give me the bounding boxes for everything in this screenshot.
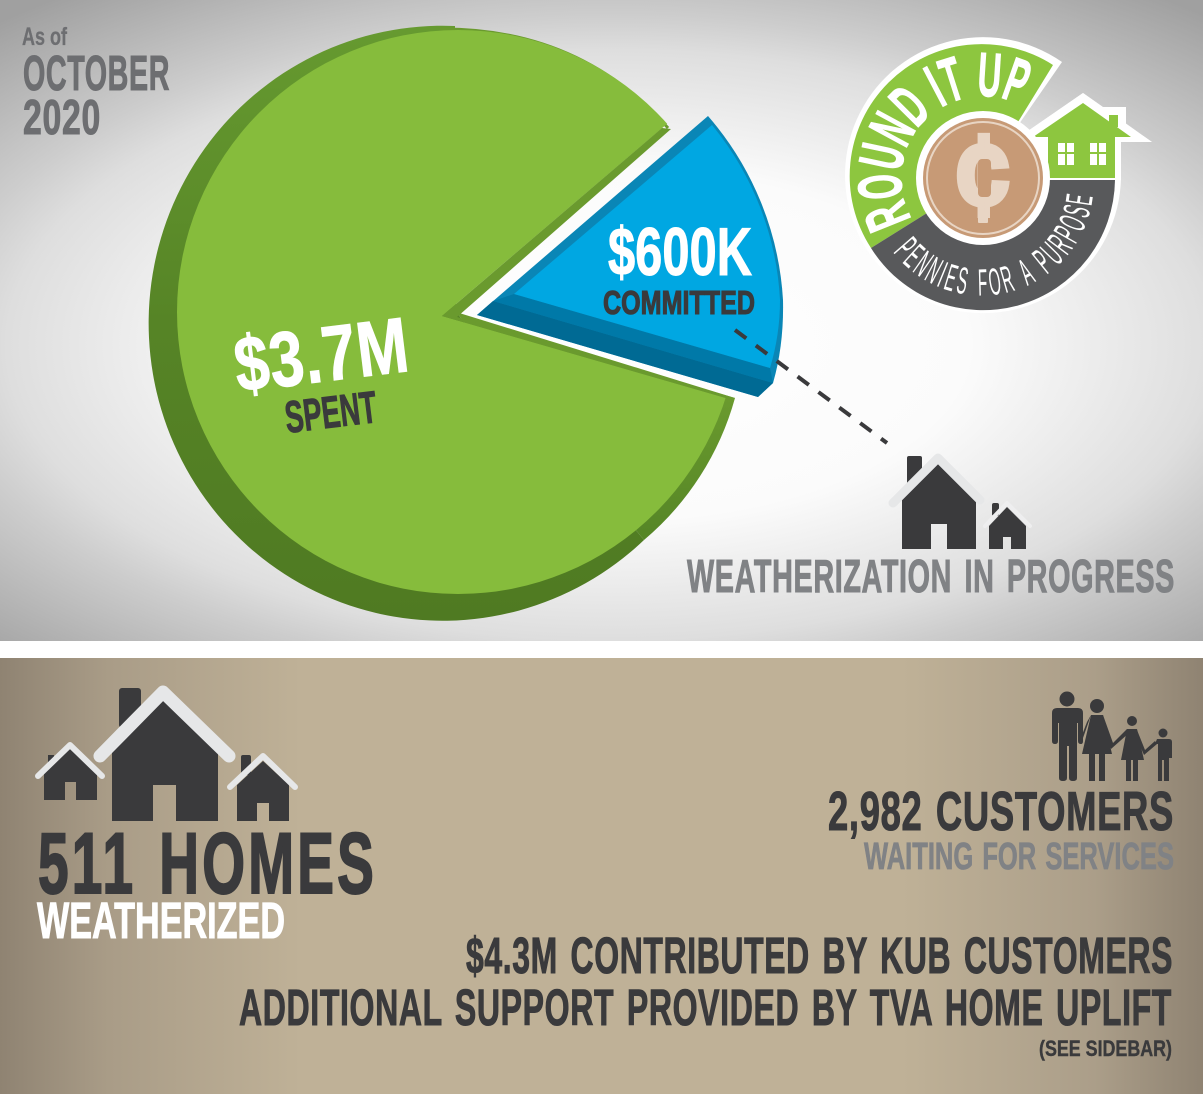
panel: bottom background <box>0 658 1203 1094</box>
icon: three homes <box>38 688 295 821</box>
text block: contributions <box>239 927 1173 1061</box>
girl <box>1121 716 1157 781</box>
text block: contributions: (SEE SIDEBAR) <box>1039 1036 1172 1061</box>
stat: homes weatherized: 511 HOMES <box>38 816 377 912</box>
blue slice: committed <box>477 116 783 397</box>
dashed leader line <box>735 330 887 443</box>
logo curved text: pennies for a purpose: PENNIES FOR A PURPOSE <box>894 194 1093 296</box>
green slice: spent <box>177 30 739 594</box>
boy <box>1155 728 1172 781</box>
date label: OCTOBER <box>23 47 170 101</box>
logo coin: ¢ <box>957 112 1009 237</box>
logo grey ring <box>871 178 1115 310</box>
label: spent: SPENT <box>282 381 380 443</box>
logo house <box>1025 93 1152 180</box>
stat: customers waiting <box>828 780 1174 878</box>
date label: 2020 <box>23 91 101 145</box>
logo green ring <box>850 44 1053 248</box>
man <box>1052 692 1083 781</box>
logo white backing <box>845 37 1152 313</box>
label: committed: $600K <box>608 214 752 290</box>
pie chart <box>149 26 783 621</box>
logo coin <box>916 111 1050 245</box>
label: committed: COMMITTED <box>603 284 755 321</box>
label: spent <box>229 300 414 443</box>
green slice edge bands <box>442 128 735 399</box>
logo curved text: round it up: ROUND IT UP <box>858 52 1031 234</box>
label: spent: $3.7M <box>229 300 414 409</box>
woman <box>1079 699 1129 781</box>
stat: homes weatherized: WEATHERIZED <box>37 892 285 949</box>
icon: weatherization houses <box>893 456 1030 549</box>
pie depth shadow <box>149 26 644 621</box>
label: committed <box>603 214 755 321</box>
green slice top rim <box>440 29 668 128</box>
stat: homes weatherized <box>37 816 377 949</box>
panel: top background <box>0 0 1203 641</box>
green slice rim right side <box>456 312 735 540</box>
logo: round it up <box>845 37 1152 312</box>
date label <box>22 23 170 145</box>
date label: As of <box>22 23 67 51</box>
icon: family <box>1052 692 1172 781</box>
